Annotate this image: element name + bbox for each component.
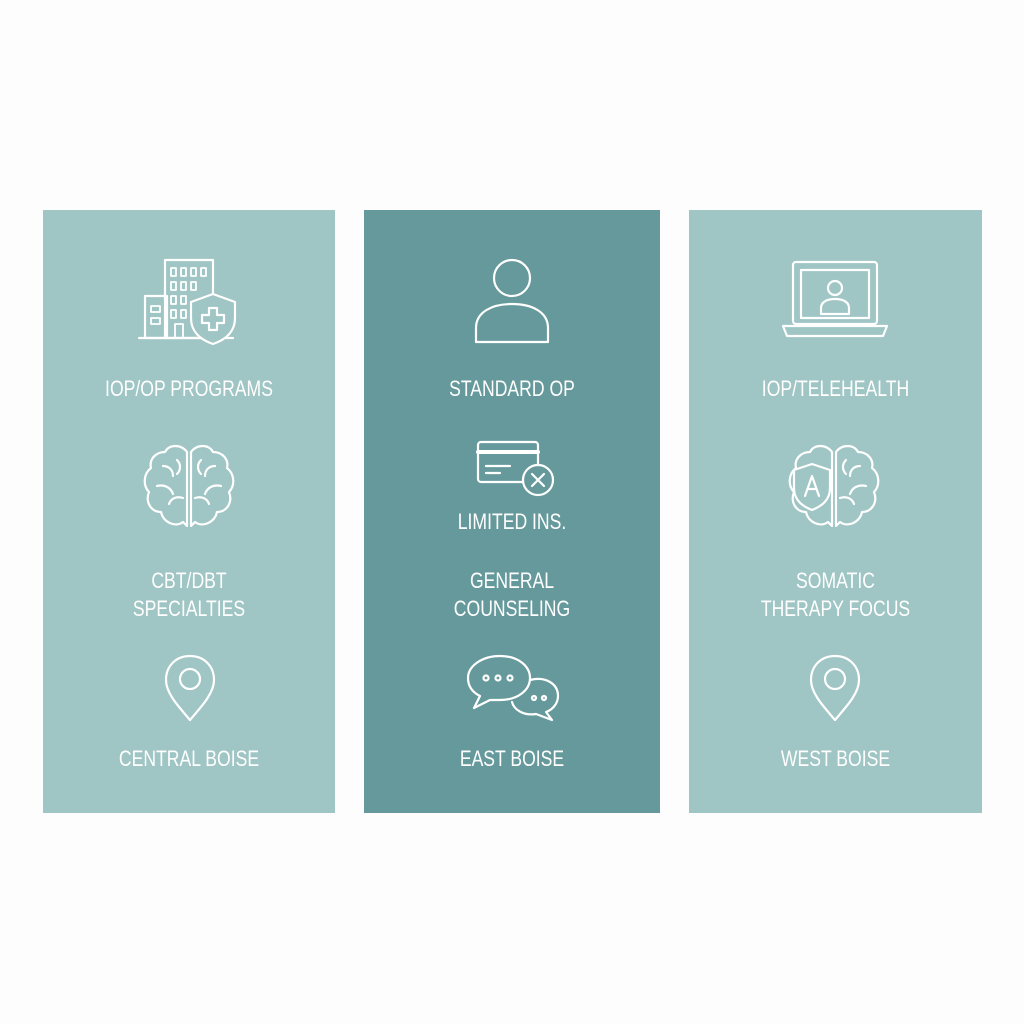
icon: brain with shield A	[788, 444, 880, 528]
icon: location pin	[810, 654, 860, 722]
panel: central boise	[43, 210, 335, 813]
text: general counseling: COUNSELING	[454, 596, 570, 621]
heading: standard OP: STANDARD OP	[449, 376, 575, 401]
panel: west boise	[689, 210, 982, 813]
text: west boise: WEST BOISE	[781, 746, 890, 771]
text: somatic therapy focus: THERAPY FOCUS	[761, 596, 910, 621]
text: somatic therapy focus	[761, 568, 910, 621]
heading: IOP/telehealth: IOP/TELEHEALTH	[762, 376, 909, 401]
text: limited ins: LIMITED INS.	[458, 509, 566, 534]
text: somatic therapy focus: SOMATIC	[796, 568, 875, 593]
icon: laptop telehealth	[782, 260, 888, 338]
text: CBT/DBT specialties: SPECIALTIES	[133, 596, 245, 621]
icon: brain	[144, 444, 234, 528]
panel: east boise	[364, 210, 660, 813]
icon: chat bubbles	[466, 654, 560, 722]
text: east boise: EAST BOISE	[460, 746, 564, 771]
text: CBT/DBT specialties: CBT/DBT	[151, 568, 227, 593]
heading: IOP/OP programs: IOP/OP PROGRAMS	[105, 376, 273, 401]
icon: location pin	[164, 654, 216, 722]
icon: hospital building with shield	[138, 258, 236, 345]
icon: person	[474, 258, 550, 344]
text: general counseling: GENERAL	[470, 568, 554, 593]
icon: card with x	[476, 440, 554, 496]
text: central boise: CENTRAL BOISE	[119, 746, 259, 771]
text: general counseling	[454, 568, 570, 621]
text: CBT/DBT specialties	[133, 568, 245, 621]
